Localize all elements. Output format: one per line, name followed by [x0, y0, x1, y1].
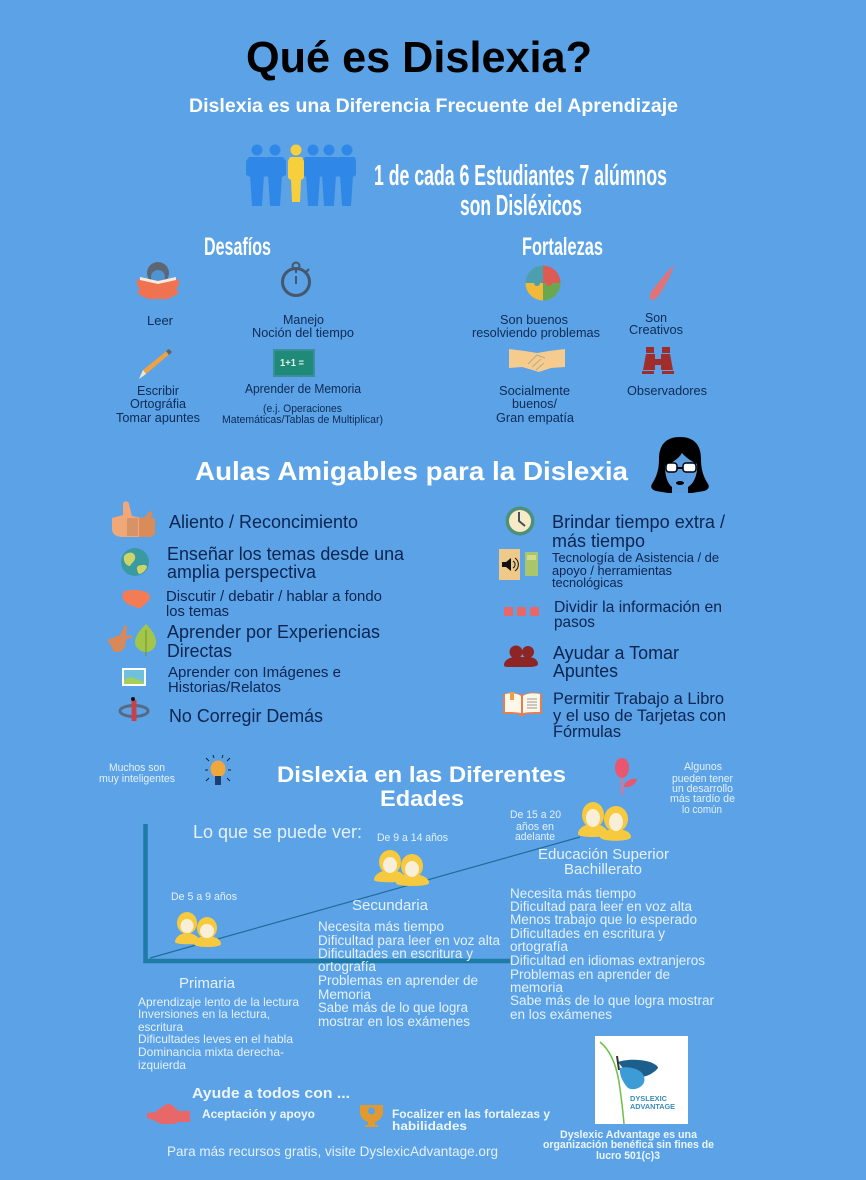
icon: six people, one highlighted: [246, 144, 356, 206]
item: dividir: Dividir la información en: [554, 599, 722, 616]
note: muchos son muy inteligentes: [99, 762, 175, 785]
icon: speaker and calculator: [499, 549, 538, 580]
list: primaria signs: Aprendizaje lento de la lectura: [138, 995, 299, 1009]
label: socialmente buenos: [496, 383, 575, 425]
icon: globe: [121, 548, 149, 576]
label: aprender de memoria: Matemáticas/Tablas de Multiplicar): [222, 414, 383, 426]
icon: pointing hand and leaf: [107, 624, 156, 656]
item: imágenes: Historias/Relatos: [168, 679, 281, 696]
icon: light bulb: [205, 755, 231, 785]
list: primaria signs: escritura: [138, 1020, 183, 1034]
item: discutir: los temas: [166, 603, 229, 620]
chart: axes and growth line: [146, 824, 580, 961]
panel: primaria: [138, 975, 299, 1072]
list: secundaria signs: Sabe más de lo que logra: [318, 1000, 468, 1015]
caption: organization note: Dyslexic Advantage es una: [560, 1129, 698, 1141]
label: resolver problemas: [472, 312, 600, 340]
icon: stopwatch: [282, 262, 310, 296]
label: aprender de memoria: (e.j. Operaciones: [263, 403, 342, 415]
item: imágenes: [168, 664, 341, 696]
list: secundaria signs: Problemas en aprender de: [318, 973, 478, 988]
title: Qué es Dislexia?: [246, 33, 592, 82]
item: no corregir: No Corregir Demás: [169, 706, 323, 726]
panel: educación superior: [510, 846, 715, 1022]
label: aprender de memoria: Aprender de Memoria: [245, 381, 362, 396]
item: tecnología: tecnológicas: [552, 575, 623, 590]
list: secundaria signs: [318, 919, 500, 1029]
list: secundaria signs: Necesita más tiempo: [318, 919, 444, 934]
label: de 15 a 20 años: años en: [516, 821, 554, 833]
heading: desafíos: Desafíos: [204, 233, 271, 261]
icon: pencil: [139, 349, 172, 379]
icon: child reading: [137, 262, 179, 299]
label: focalizer: [392, 1107, 550, 1133]
list: secundaria signs: mostrar en los exámenes: [318, 1014, 470, 1029]
item: tecnología: Tecnología de Asistencia / de: [552, 550, 719, 565]
label: creativos: Son: [645, 310, 667, 325]
subtitle: Dislexia es una Diferencia Frecuente del Aprendizaje: [189, 96, 678, 117]
note: desarrollo tardío: Algunos: [684, 761, 722, 773]
label: focalizer: Focalizer en las fortalezas y: [392, 1107, 550, 1121]
panel: secundaria: [318, 897, 500, 1029]
label: aceptación y apoyo: Aceptación y apoyo: [202, 1107, 315, 1121]
icon: two people: [504, 646, 538, 667]
icon: speech bubbles: [122, 590, 150, 608]
icon: teen pair: [374, 850, 429, 886]
list: primaria signs: Dominancia mixta derecha-: [138, 1045, 284, 1059]
icon: binoculars: [642, 347, 674, 374]
item: perspectiva: amplia perspectiva: [167, 562, 317, 582]
section heading: aulas amigables: Aulas Amigables para la Dislexia: [195, 456, 629, 486]
icon: open book: [503, 692, 542, 717]
panel: fortalezas: [472, 233, 707, 425]
logo: dyslexic advantage: DYSLEXIC: [630, 1096, 667, 1103]
icon: chalkboard: [273, 349, 315, 377]
note: muchos son muy inteligentes: Muchos son: [109, 762, 165, 774]
item: aliento: Aliento / Reconcimiento: [169, 512, 358, 532]
icon: teacher with glasses: [651, 437, 709, 493]
icon: thumbs up: [112, 501, 155, 537]
list: educación superior signs: Dificultades en escritura y: [510, 926, 665, 941]
statistic headline: 1 de cada 6 Estudiantes 7 alúmnos: [374, 160, 667, 192]
item: perspectiva: [167, 544, 405, 582]
label: de 15 a 20 años: [510, 809, 561, 843]
label: escribir: [116, 383, 200, 425]
item: trabajo a libro: Fórmulas: [553, 723, 621, 741]
label: lo que se puede ver: Lo que se puede ver:: [193, 822, 362, 842]
item: tomar apuntes: Ayudar a Tomar: [553, 643, 679, 663]
item: tiempo extra: más tiempo: [552, 531, 645, 551]
caption: organization note: organización benéfica sin fines de: [543, 1139, 714, 1151]
item: experiencias directas: [167, 622, 380, 661]
icon: handshake: [509, 349, 565, 372]
section heading: edades: Dislexia en las Diferentes: [277, 762, 566, 787]
list: educación superior signs: memoria: [510, 980, 563, 995]
item: imágenes: Aprender con Imágenes e: [168, 664, 341, 681]
icon: clock: [506, 506, 534, 536]
note: desarrollo tardío: lo común: [682, 804, 722, 816]
icon: picture: [122, 668, 146, 686]
item: dividir: pasos: [554, 614, 595, 631]
list: educación superior signs: Necesita más tiempo: [510, 886, 636, 901]
label: manejo: [252, 312, 354, 340]
item: tomar apuntes: Apuntes: [553, 661, 618, 681]
icon: helping hand: [147, 1104, 190, 1124]
caption: organization note: [543, 1129, 714, 1162]
panel: classroom list left: [107, 501, 405, 726]
icon: no correcting pencil: [120, 697, 148, 721]
label: creativos: Creativos: [629, 322, 683, 337]
heading: ayude a todos: Ayude a todos con ...: [192, 1085, 350, 1102]
icon: three squares: [504, 607, 539, 616]
panel: ayude a todos: [147, 1085, 550, 1133]
list: educación superior signs: en los exámenes: [510, 1007, 612, 1022]
item: tecnología: [552, 550, 719, 590]
item: tecnología: apoyo / herramientas: [552, 563, 672, 578]
list: secundaria signs: ortografía: [318, 959, 376, 974]
item: experiencias directas: Aprender por Experiencias: [167, 622, 380, 642]
panel: desafíos: [116, 233, 383, 426]
icon: chalkboard: 1+1 =: [280, 358, 304, 369]
logo: dyslexic advantage: [595, 1036, 688, 1124]
list: educación superior signs: Menos trabajo que lo esperado: [510, 912, 697, 927]
heading: educación superior: [538, 846, 669, 878]
heading: fortalezas: Fortalezas: [522, 233, 603, 261]
label: manejo: Manejo: [283, 312, 324, 327]
icon: paintbrush: [650, 265, 674, 300]
note: desarrollo tardío: [670, 761, 735, 816]
list: primaria signs: Dificultades leves en el habla: [138, 1032, 293, 1046]
item: tiempo extra: [552, 512, 725, 551]
caption: organization note: lucro 501(c)3: [596, 1150, 660, 1162]
list: primaria signs: [138, 995, 299, 1072]
icon: puzzle: [526, 266, 560, 300]
item: experiencias directas: Directas: [167, 641, 232, 661]
heading: primaria: Primaria: [179, 975, 236, 992]
label: escribir: Escribir: [137, 383, 180, 398]
icon: young adult pair: [578, 802, 631, 841]
statistic headline: son Disléxicos: [460, 190, 582, 222]
label: escribir: Ortográfia: [130, 396, 187, 411]
label: creativos: [629, 310, 683, 337]
icon: young children pair: [175, 912, 221, 947]
label: manejo: Noción del tiempo: [252, 325, 354, 340]
note: desarrollo tardío: pueden tener: [672, 773, 733, 785]
list: educación superior signs: [510, 886, 715, 1022]
list: educación superior signs: Dificultad para leer en voz alta: [510, 899, 692, 914]
item: perspectiva: Enseñar los temas desde una: [167, 544, 405, 564]
list: educación superior signs: Sabe más de lo que logra mostrar: [510, 993, 715, 1008]
label: resolver problemas: resolviendo problemas: [472, 325, 600, 340]
item: tiempo extra: Brindar tiempo extra /: [552, 512, 725, 532]
list: educación superior signs: Dificultad en idiomas extranjeros: [510, 953, 705, 968]
icon: rose: [615, 758, 637, 795]
footer link text: Para más recursos gratis, visite DyslexicAdvantage.org: [167, 1143, 498, 1159]
list: secundaria signs: Memoria: [318, 987, 371, 1002]
heading: secundaria: Secundaria: [352, 897, 429, 914]
label: de 15 a 20 años: adelante: [515, 831, 555, 843]
label: de 15 a 20 años: De 15 a 20: [510, 809, 561, 821]
label: escribir: Tomar apuntes: [116, 410, 200, 425]
logo: dyslexic advantage: ADVANTAGE: [630, 1104, 675, 1111]
label: de 9 a 14 años: De 9 a 14 años: [377, 832, 448, 844]
heading: educación superior: Educación Superior: [538, 846, 669, 863]
list: secundaria signs: Dificultades en escritura y: [318, 946, 473, 961]
item: tomar apuntes: [553, 643, 679, 681]
label: socialmente buenos: buenos/: [512, 396, 557, 411]
list: secundaria signs: Dificultad para leer en voz alta: [318, 933, 500, 948]
note: muchos son muy inteligentes: muy inteligentes: [99, 773, 175, 785]
note: desarrollo tardío: más tardío de: [670, 793, 735, 805]
list: educación superior signs: Problemas en aprender de: [510, 967, 670, 982]
label: socialmente buenos: Gran empatía: [496, 410, 575, 425]
list: educación superior signs: ortografía: [510, 939, 568, 954]
item: trabajo a libro: y el uso de Tarjetas con: [553, 707, 726, 725]
icon: trophy: [360, 1105, 383, 1127]
panel: classroom list right: [499, 506, 726, 741]
label: observadores: Observadores: [627, 383, 707, 398]
section heading: edades: Edades: [380, 786, 464, 811]
list: primaria signs: Inversiones en la lectura,: [138, 1007, 270, 1021]
list: primaria signs: izquierda: [138, 1058, 186, 1072]
section heading: edades: [277, 762, 566, 811]
label: de 5 a 9 años: De 5 a 9 años: [171, 891, 237, 903]
item: discutir: Discutir / debatir / hablar a fondo: [166, 588, 382, 605]
label: aprender de memoria: [222, 381, 383, 426]
heading: educación superior: Bachillerato: [564, 861, 642, 878]
note: desarrollo tardío: un desarrollo: [672, 783, 733, 795]
statistic headline: [374, 160, 667, 222]
label: focalizer: habilidades: [392, 1119, 467, 1133]
label: leer: Leer: [147, 313, 174, 328]
label: resolver problemas: Son buenos: [500, 312, 568, 327]
item: dividir: [554, 599, 722, 631]
item: discutir: [166, 588, 382, 620]
label: socialmente buenos: Socialmente: [499, 383, 570, 398]
item: trabajo a libro: Permitir Trabajo a Libro: [553, 690, 724, 708]
item: trabajo a libro: [553, 690, 726, 741]
